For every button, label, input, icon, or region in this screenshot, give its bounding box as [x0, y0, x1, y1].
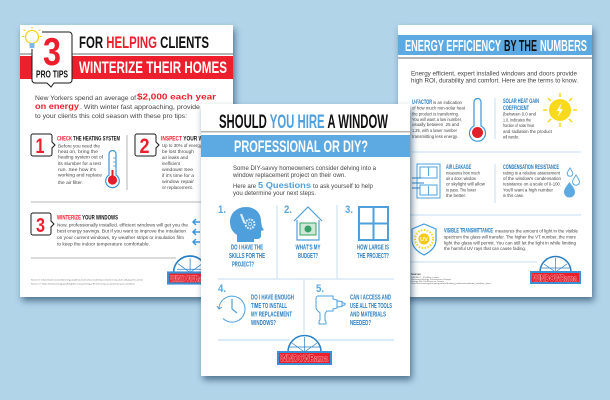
intro text: you determine your next steps.	[233, 191, 316, 197]
intro text: Some DIY-savvy homeowners consider delving into a	[233, 166, 377, 172]
tip 2: inspect windows: inefficient	[162, 161, 181, 166]
intro text: $2,000 each year	[137, 92, 216, 102]
term: condensation resistance: rating is a relative assessment	[503, 170, 561, 176]
tip 2: inspect windows: 2	[140, 135, 150, 158]
term: visible transmittance: measures the amount of light in the visible	[495, 228, 578, 234]
term: condensation resistance: CONDENSATION RESISTANCE	[503, 164, 559, 171]
heading band: professional or diy: PROFESSIONAL OR DIY?	[234, 137, 368, 156]
term: condensation resistance: You'll want a high number	[503, 188, 553, 192]
question 5: AND MATERIALS	[350, 312, 386, 318]
question 2: WHAT'S MY	[296, 244, 321, 252]
intro text: to your clients this cold season with these pro tips:	[35, 114, 187, 120]
icon: water drops	[564, 168, 580, 198]
tip 2: inspect windows: if it's time for a	[162, 173, 194, 178]
intro text: to ask yourself to help	[313, 184, 374, 190]
tip 2: inspect windows: Up to 30% of energy	[162, 143, 203, 148]
icon: blue arrows	[193, 219, 200, 245]
question 1: PROJECT?	[232, 262, 254, 268]
term: u-factor: is an indication	[433, 100, 462, 105]
term: u-factor: transmitting less energy.	[412, 134, 458, 139]
term: u-factor	[412, 99, 466, 139]
question 5	[316, 283, 392, 327]
term: u-factor: 1.25, with a lower number	[412, 128, 457, 133]
sources: Source 2: https://www.energy.gov/blog/five-easy-energy-efficient-ways-to-winterize-your-windows	[31, 282, 136, 286]
tip 1: heating system: Before you need the	[58, 144, 100, 148]
question 4: MY REPLACEMENT	[251, 312, 292, 318]
intro text	[411, 72, 578, 84]
tip 1: heating system: heat on, bring the	[58, 149, 98, 154]
tip 2: inspect windows: window repair	[162, 179, 195, 184]
question 4: 4.	[218, 283, 226, 295]
term: air leakage: measures how much	[446, 170, 480, 176]
tip 2: inspect windows: be lost through	[162, 149, 194, 154]
term: solar heat gain coefficient: SOLAR HEAT GAIN	[503, 98, 539, 105]
term: u-factor: You will want a low number,	[412, 117, 462, 122]
term: air leakage: air a door, window	[446, 176, 477, 181]
logo: windowrama	[530, 257, 581, 284]
intro text: window replacement project on their own.	[232, 173, 346, 179]
callout: 3 pro tips: 3	[43, 31, 61, 74]
sources: https://www.energystar.gov/products/building_products/residential_windows_doors	[411, 282, 491, 285]
intro text: Energy efficient, expert installed windows and doors provide	[411, 72, 578, 78]
callout: 3 pro tips: PRO TIPS	[36, 70, 68, 80]
sources: NFRC, Pella.com	[411, 277, 440, 279]
question 5: CAN I ACCESS AND	[350, 294, 391, 302]
term: visible transmittance	[444, 228, 578, 251]
term: visible transmittance: VISIBLE TRANSMITTANCE	[444, 228, 493, 234]
intro text: high ROI, durability and comfort. Here are the terms to know.	[411, 78, 578, 84]
icon: power drill	[316, 296, 345, 324]
icon: uv shield: UV	[420, 237, 428, 243]
question 1: DO I HAVE THE	[231, 244, 263, 252]
term: solar heat gain coefficient: COEFFICIENT	[503, 105, 529, 112]
question 1: SKILLS FOR THE	[229, 253, 265, 260]
sources	[411, 273, 491, 285]
question 5: 5.	[316, 283, 324, 295]
tip 3: winterize windows: best energy savings. But if you want to improve the insulation	[57, 228, 186, 234]
question 5: NEEDED?	[350, 320, 371, 327]
tip 2: inspect windows: air leaks and	[162, 155, 188, 160]
term: solar heat gain coefficient: and radiation the product	[503, 129, 553, 134]
heading band: ENERGY EFFICIENCY	[405, 38, 501, 55]
sources: Energy Star Performance Criteria	[411, 280, 445, 283]
heading band: professional or diy	[201, 135, 410, 157]
logo: windowrama	[277, 336, 332, 365]
icon: thermometer	[106, 151, 119, 188]
icon: window	[359, 207, 388, 240]
intro text: . With winter fast approaching, provide	[80, 105, 201, 111]
question 2	[284, 204, 322, 260]
tip 3: winterize windows	[31, 213, 188, 246]
term: u-factor: U-FACTOR	[412, 99, 432, 106]
title: should you hire a window: SHOULD YOU HIRE A WINDOW	[219, 112, 388, 133]
question 1: 1.	[218, 204, 226, 216]
term: solar heat gain coefficient: fraction of solar heat	[503, 123, 535, 128]
tip 2: inspect windows: or replacement.	[162, 185, 193, 190]
logo: windowrama	[167, 256, 213, 285]
term: air leakage: the better.	[446, 193, 466, 198]
tip 1: heating system: CHECK THE HEATING SYSTEM	[57, 136, 120, 142]
question 3	[345, 204, 389, 260]
heading band: BY THE	[504, 38, 537, 55]
tip 1: heating system: run. See how it's	[58, 167, 97, 172]
tip 1: heating system	[31, 134, 120, 188]
term: air leakage: or skylight will allow	[446, 182, 486, 186]
term: visible transmittance: the harmful UV rays that can cause fading.	[444, 246, 526, 251]
tip 2: inspect windows: INSPECT YOUR WINDOWS	[161, 136, 223, 142]
question 3: THE PROJECT?	[357, 253, 389, 260]
term: visible transmittance: spectrum the glass will transfer. The higher the VT number, the more	[444, 234, 576, 240]
tip 1: heating system: its slumber for a test	[58, 161, 102, 166]
question 3: HOW LARGE IS	[357, 244, 389, 252]
tip 3: winterize windows: on your current windows, try weather strips or insulation film	[57, 235, 184, 240]
sources	[31, 278, 143, 286]
icon: light bulb	[21, 26, 42, 49]
sources: Source 1: https://www.statewideenergy.org/how-much-the-residential-customers-by-state-will-pay-this-winter	[31, 278, 143, 282]
term: u-factor: the product is transferring.	[412, 112, 459, 116]
question 4: TIME TO INSTALL	[251, 303, 287, 310]
tip 1: heating system: 1	[36, 135, 45, 158]
tip 2: inspect windows: windows! See	[162, 167, 193, 172]
tip 1: heating system: working and replace	[58, 172, 102, 178]
term: air leakage: to pass. The lower	[446, 188, 476, 192]
term: condensation resistance: in this case.	[503, 193, 524, 198]
panel: hire a window professional sheet	[201, 104, 410, 376]
logo: windowrama: WINDOWRama	[533, 274, 577, 283]
intro text	[232, 166, 377, 197]
tip 3: winterize windows: Now, professionally installed, efficient windows will get you the	[57, 222, 188, 228]
icon: clock	[217, 296, 245, 322]
question 2: 2.	[284, 204, 292, 216]
term: solar heat gain coefficient	[503, 98, 553, 140]
term: air leakage	[446, 164, 486, 198]
question 4: WINDOWS?	[251, 320, 276, 327]
term: solar heat gain coefficient: 1.0, indicates the	[503, 118, 531, 122]
question 4: DO I HAVE ENOUGH	[251, 294, 294, 302]
intro text	[35, 92, 216, 120]
header band	[20, 53, 233, 79]
icon: window with air	[412, 164, 440, 198]
term: u-factor: of how much non-solar heat	[412, 106, 466, 110]
term: air leakage: AIR LEAKAGE	[446, 164, 471, 171]
question 3: 3.	[345, 204, 353, 216]
sources: Measuring Energy Performance Ratings	[411, 278, 451, 281]
logo: windowrama: WINDOWRama	[280, 354, 329, 364]
term: condensation resistance	[503, 164, 561, 198]
term: condensation resistance: of the window's condensation	[503, 176, 561, 181]
icon: uv shield	[412, 224, 436, 255]
icon: house with money	[294, 207, 322, 240]
icon: sun	[543, 93, 577, 127]
question 1	[218, 204, 265, 268]
tip 3: winterize windows: 3	[36, 215, 45, 237]
callout: 3 pro tips	[32, 31, 72, 87]
question 2: BUDGET?	[298, 253, 318, 260]
panel: pro tips sheet	[20, 25, 233, 297]
question 5: USE ALL THE TOOLS	[350, 303, 392, 310]
logo: windowrama: WINDOWRama	[170, 274, 210, 283]
intro text: on energy	[35, 102, 80, 111]
intro text: Here are	[233, 184, 257, 190]
tip 2: inspect windows	[135, 134, 223, 190]
term: condensation resistance: resistance on a scale of 0-100.	[503, 182, 561, 186]
intro text: New Yorkers spend an average of	[35, 96, 136, 102]
panel: energy efficiency sheet	[398, 25, 592, 297]
term: visible transmittance: light the glass will permit. You can still let the light in while limiting	[444, 240, 576, 246]
question 4	[217, 283, 294, 327]
heading band	[398, 35, 592, 59]
title: winterize their homes: WINTERIZE THEIR HOMES	[79, 58, 227, 77]
term: solar heat gain coefficient: will transfer.	[503, 134, 519, 140]
tip 1: heating system: the air filter.	[58, 180, 83, 185]
term: u-factor: usually between .25 and	[412, 122, 459, 127]
icon: head with gears	[230, 207, 264, 242]
term: solar heat gain coefficient: (between 0.0 and	[503, 112, 536, 116]
tip 3: winterize windows: WINTERIZE YOUR WINDOWS	[57, 214, 118, 222]
sources: Sources:	[411, 273, 421, 276]
title: for helping clients: FOR HELPING CLIENTS	[79, 33, 209, 52]
tip 3: winterize windows: to keep the indoor temperature comfortable.	[57, 242, 150, 246]
tip 1: heating system: heating system out of	[58, 154, 104, 160]
icon: red thermometer	[470, 99, 486, 141]
intro text: 5 Questions	[258, 181, 312, 190]
